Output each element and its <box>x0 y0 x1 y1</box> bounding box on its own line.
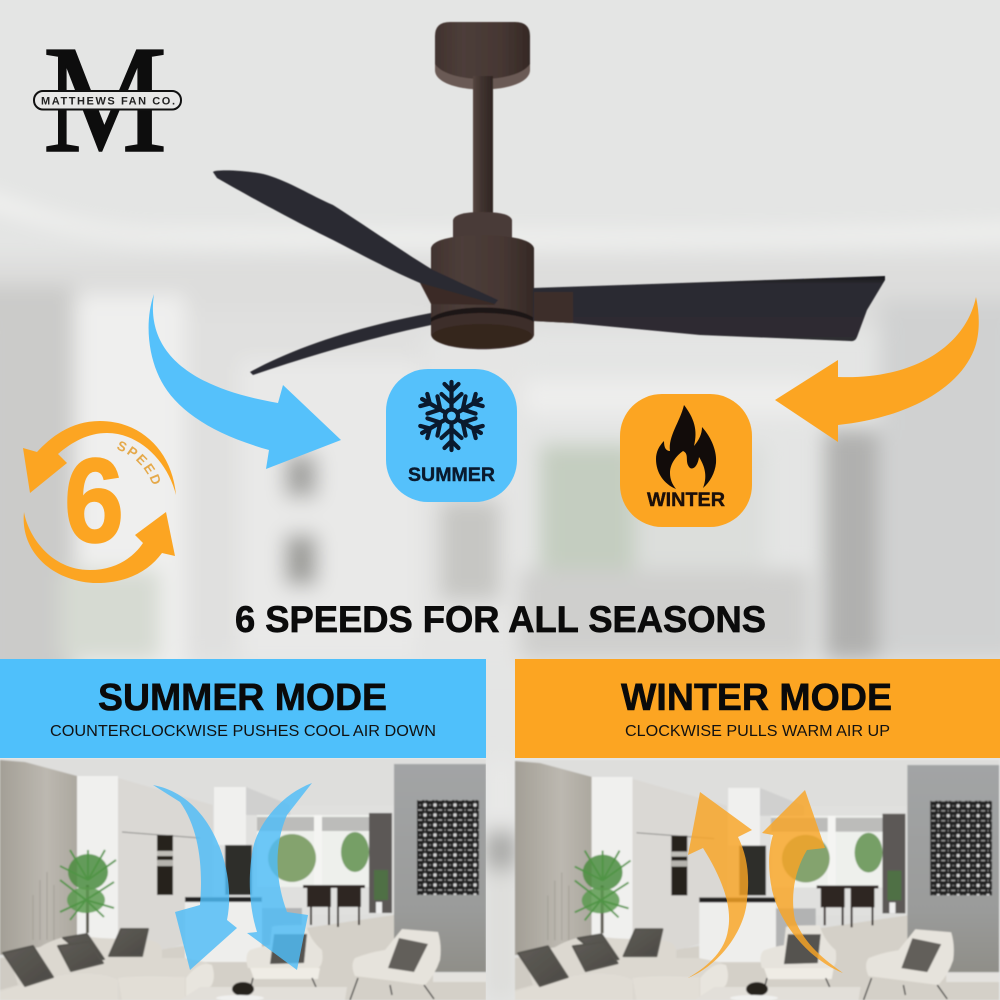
winter translucent up arrows <box>688 790 843 978</box>
winter label: WINTER <box>647 490 725 511</box>
badge: winter <box>620 394 752 527</box>
winter header band <box>515 659 1000 758</box>
summer subtitle: COUNTERCLOCKWISE PUSHES COOL AIR DOWN <box>50 723 436 740</box>
winter room photo <box>515 760 999 1000</box>
badge: summer <box>386 369 517 502</box>
icon: snowflake <box>417 382 486 450</box>
icon: six speed cycle <box>23 421 176 583</box>
fan blade: upper left <box>213 170 498 305</box>
fan blade: right <box>533 276 885 341</box>
fan blade: lower left <box>250 313 431 375</box>
winter title: WINTER MODE <box>621 677 892 719</box>
panel: summer mode <box>0 659 486 1000</box>
speed label: SPEED <box>117 441 160 484</box>
top arrow <box>23 421 176 495</box>
digit 6: 6 <box>64 434 124 568</box>
logo: Matthews Fan Co.: M <box>43 15 167 185</box>
summer label: SUMMER <box>408 465 495 486</box>
bottom arrow <box>24 512 175 583</box>
fan ceiling mount <box>435 22 530 90</box>
summer translucent down arrows <box>153 783 312 970</box>
winter subtitle: CLOCKWISE PULLS WARM AIR UP <box>625 723 890 740</box>
icon: flame <box>656 405 716 489</box>
ceiling fan <box>213 22 885 375</box>
summer title: SUMMER MODE <box>98 677 387 719</box>
panel: winter mode <box>515 659 1000 1000</box>
heading: 6 SPEEDS FOR ALL SEASONS <box>235 599 766 640</box>
logo: Matthews Fan Co.: MATTHEWS FAN CO. <box>41 96 175 108</box>
summer header band <box>0 659 486 758</box>
arrow: blue summer airflow <box>149 294 341 469</box>
arrow: orange winter airflow <box>775 297 979 442</box>
summer room photo <box>0 759 486 1000</box>
fan motor housing <box>431 212 534 349</box>
fan downrod <box>473 76 493 213</box>
